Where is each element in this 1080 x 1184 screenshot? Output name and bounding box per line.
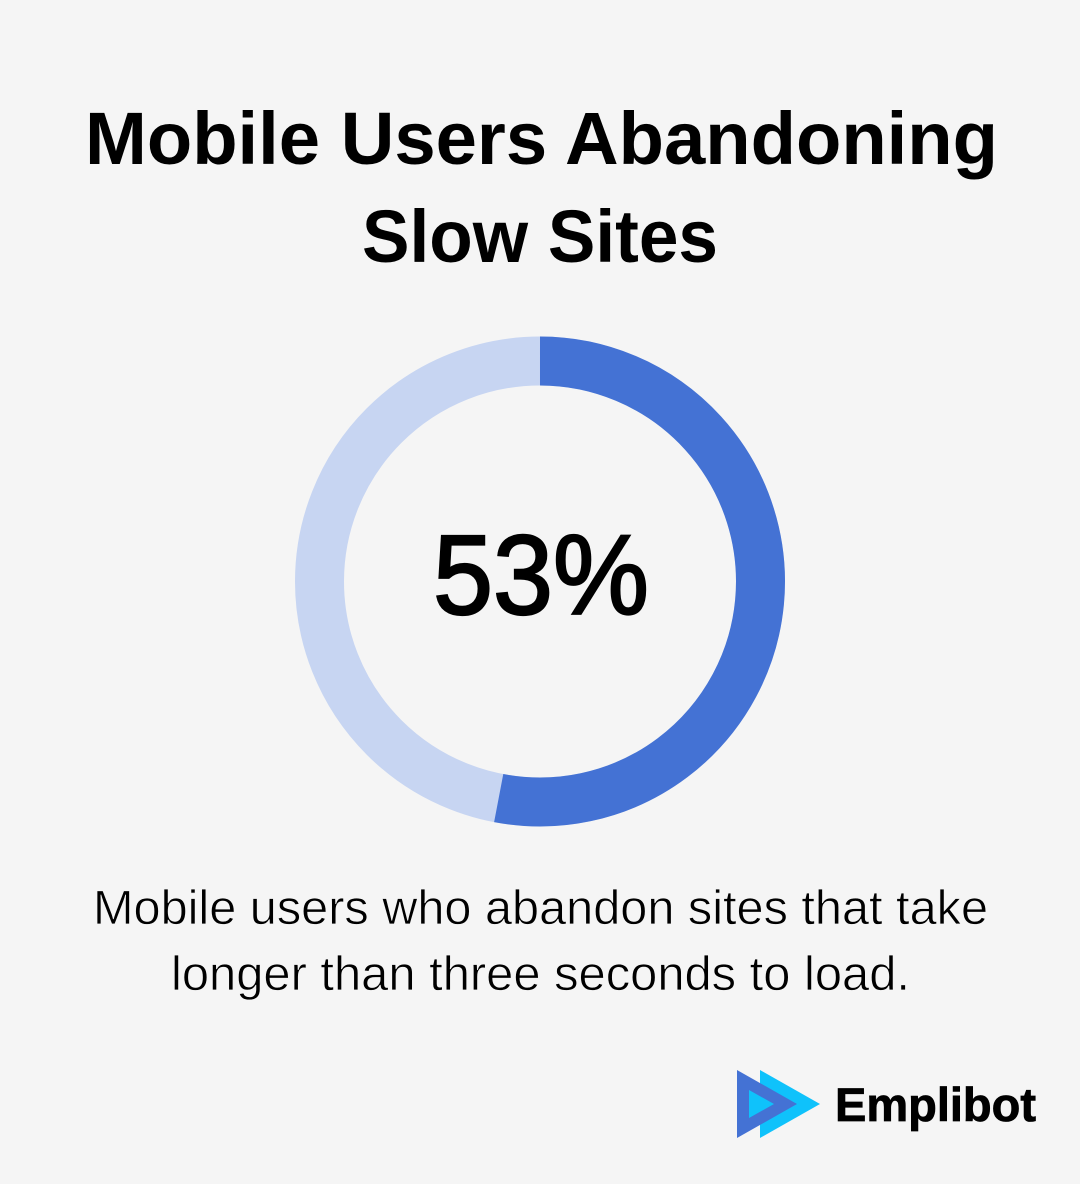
value: 53%: 53%	[433, 512, 649, 638]
donut track: remaining 47%	[320, 361, 760, 802]
logo: Emplibot	[737, 1070, 1036, 1138]
title: Mobile Users Abandoning	[85, 97, 998, 180]
wordmark: Emplibot	[835, 1078, 1036, 1131]
description: longer than three seconds to load.	[171, 948, 910, 1001]
title	[85, 97, 998, 278]
donut segment: 53%	[499, 361, 760, 802]
icon: play triangles	[737, 1070, 820, 1138]
donut chart	[320, 361, 760, 802]
title: Slow Sites	[362, 195, 718, 278]
description	[93, 882, 988, 1001]
description: Mobile users who abandon sites that take	[93, 882, 988, 935]
